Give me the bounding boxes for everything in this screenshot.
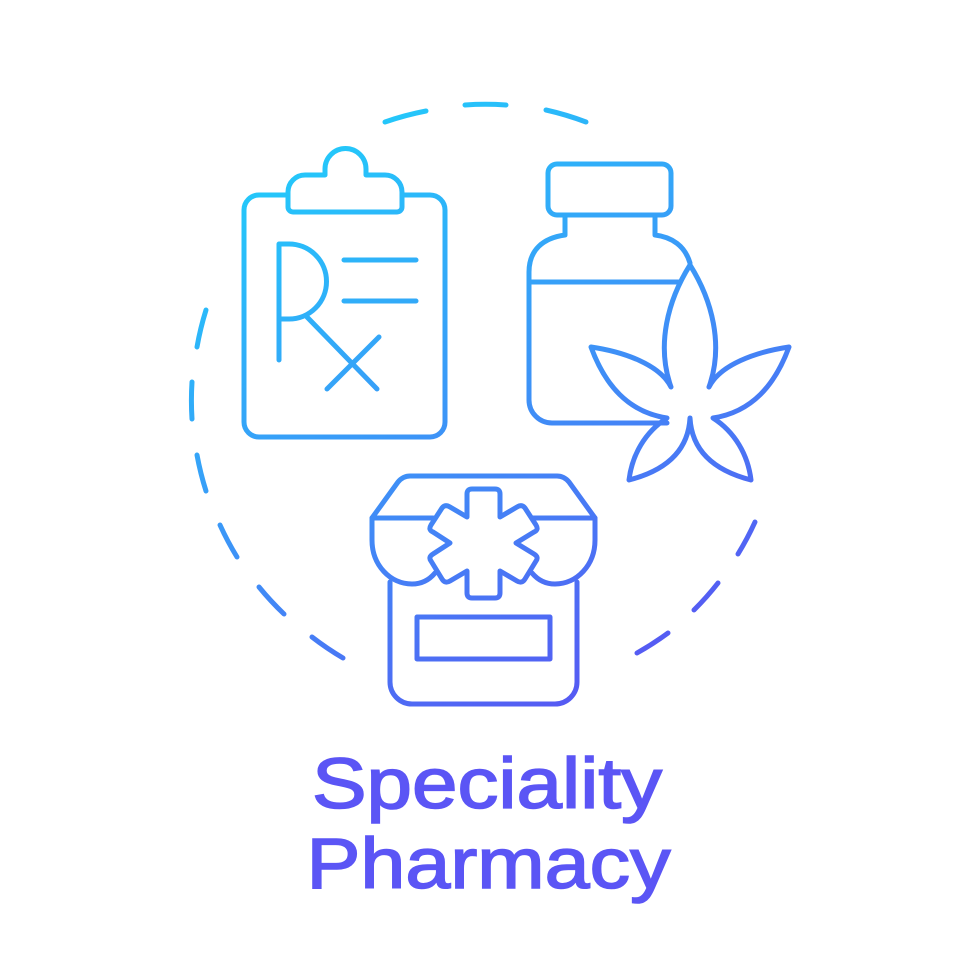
awning xyxy=(372,518,595,584)
sign board xyxy=(417,617,550,659)
store roof xyxy=(372,476,595,518)
bottle body xyxy=(529,215,690,423)
store body xyxy=(390,582,577,704)
icon: medicine bottle xyxy=(529,164,690,423)
title xyxy=(306,745,671,904)
dashed circle ring xyxy=(191,104,755,658)
Rx symbol xyxy=(279,244,379,389)
clipboard board xyxy=(244,195,445,437)
prescription lines xyxy=(344,260,416,301)
clipboard clip xyxy=(288,148,402,212)
icon: cannabis leaf xyxy=(591,265,789,480)
icon: pharmacy storefront xyxy=(372,476,595,704)
bottle cap xyxy=(548,164,671,215)
title: Speciality xyxy=(312,745,663,824)
medical star xyxy=(430,489,537,598)
title: Pharmacy xyxy=(306,825,671,904)
icon: prescription clipboard xyxy=(244,148,445,437)
